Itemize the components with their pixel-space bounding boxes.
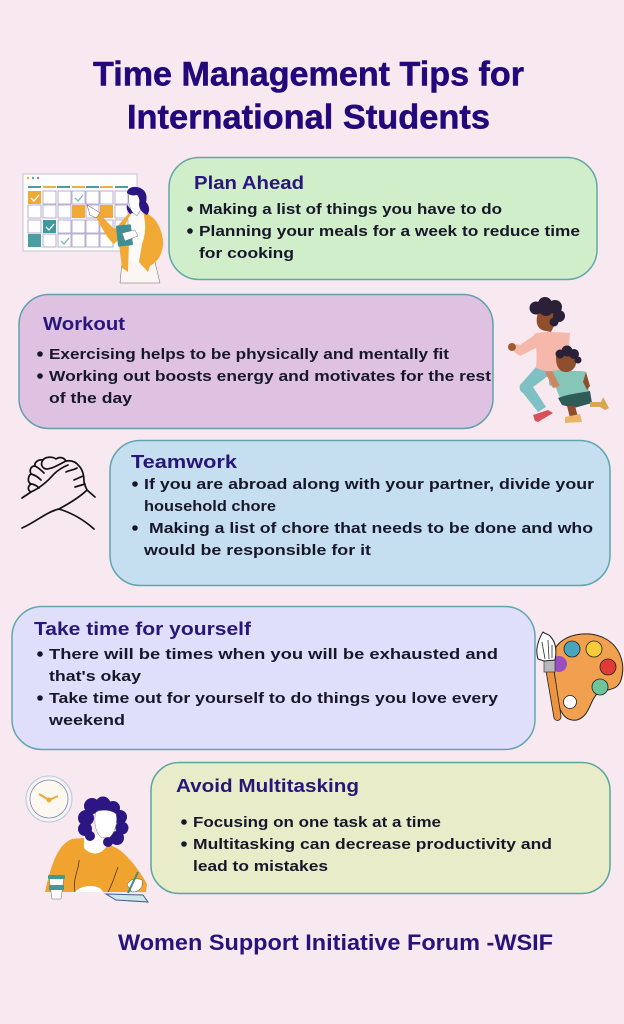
panel: teamwork: would be responsible for it [143,542,371,559]
panel: plan ahead: Making a list of things you have to do [199,201,502,218]
panel: avoid multitasking: Focusing on one task at a time [193,814,441,831]
panel: avoid multitasking: lead to mistakes [193,858,328,875]
panel: teamwork: household chore [144,498,276,515]
panel: take time for yourself: that's okay [49,668,142,685]
icon: woman writing beside clock and cup [26,776,148,902]
panel: workout: of the day [49,390,133,407]
panel: workout [19,294,493,428]
panel: plan ahead: Plan Ahead [194,173,304,193]
title [93,56,524,136]
panel: take time for yourself: Take time out for yourself to do things you love every [49,690,499,707]
panel: avoid multitasking [151,762,610,894]
panel: take time for yourself: There will be times when you will be exhausted and [49,646,498,663]
panel: take time for yourself: Take time for yourself [34,619,252,639]
panel: avoid multitasking: Multitasking can decrease productivity and [193,836,552,853]
title: International Students [127,98,490,136]
panel: avoid multitasking: Avoid Multitasking [176,776,359,796]
panel: take time for yourself: weekend [48,712,125,729]
panel: workout: Exercising helps to be physically and mentally fit [49,346,449,363]
panel: teamwork [110,440,610,586]
icon: paint palette [537,632,623,720]
panel: teamwork: Teamwork [131,452,238,472]
icon: adult and child running [508,297,609,423]
panel: plan ahead: for cooking [199,245,294,262]
panel: workout: Working out boosts energy and motivates for the rest [49,368,491,385]
footer: organisation name: Women Support Initiative Forum -WSIF [118,930,553,955]
panel: take time for yourself [12,606,535,750]
panel: teamwork: If you are abroad along with your partner, divide your [144,476,594,493]
panel: plan ahead: Planning your meals for a week to reduce time [199,223,580,240]
panel: workout: Workout [43,314,125,334]
icon: clasped hands [22,457,95,529]
title: Time Management Tips for [93,56,524,94]
panel: plan ahead [169,158,597,280]
panel: teamwork: Making a list of chore that needs to be done and who [149,520,593,537]
icon: woman pointing at calendar [23,174,163,283]
